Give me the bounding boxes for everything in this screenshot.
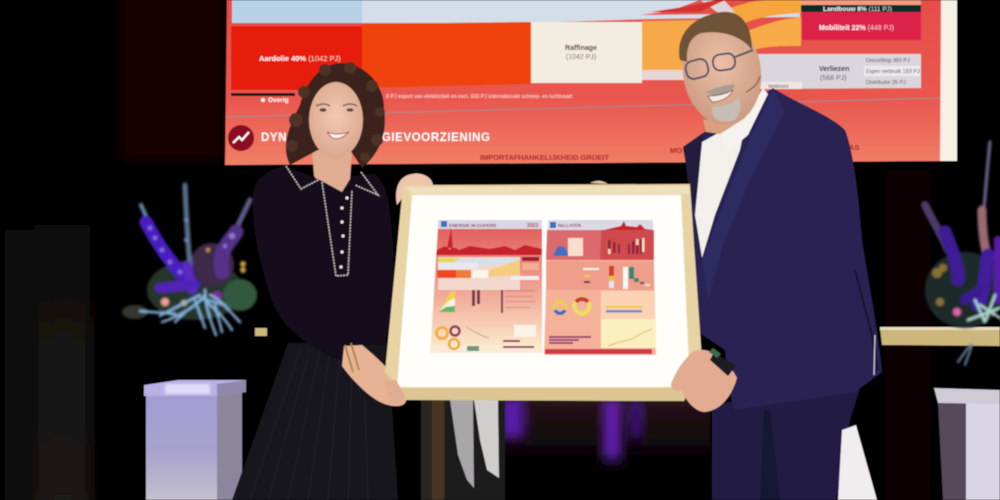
middle panel [546, 261, 654, 290]
poster purple bars [503, 340, 534, 348]
poster sankey band [437, 257, 539, 290]
Verliezen block: Omzetting 360 PJ [866, 58, 910, 64]
skyline with Eiffel tower [436, 228, 542, 255]
Verliezen block: Eigen verbruik 183 PJ [866, 69, 920, 75]
white right edge of screen [940, 0, 957, 161]
neck [312, 150, 352, 196]
stage curtain purple light [500, 395, 710, 460]
curly hair [286, 62, 385, 168]
Mobiliteit block [802, 12, 921, 40]
dim foliage [122, 243, 257, 320]
collar trim [286, 166, 378, 276]
buttons [339, 196, 349, 269]
navy jacket [683, 88, 882, 410]
fingers behind frame top [590, 181, 608, 184]
poster area chart blue [553, 246, 569, 256]
Mobiliteit block: Mobiliteit 22% (448 PJ) [819, 25, 894, 32]
white shirt [695, 125, 745, 258]
flow to refinery [362, 22, 531, 88]
white mat [397, 195, 690, 387]
purple stalks [146, 222, 193, 285]
Verliezen block: Distributie 25 PJ [866, 80, 906, 86]
poster text lines [505, 290, 535, 308]
arm and hand with bracelet [342, 343, 406, 406]
hand on top of frame [396, 174, 433, 205]
woman [232, 62, 433, 500]
woman's fingers on frame edge [384, 380, 406, 406]
Raffinage block [531, 22, 642, 83]
face [309, 82, 363, 158]
poster line chart [466, 327, 489, 338]
section heading: DYNAMIEK IN ENERGIEVOORZIENING [261, 132, 490, 144]
poster footer [545, 349, 652, 354]
Raffinage block: (1042 PJ) [566, 54, 596, 61]
poster horizontal bars [549, 306, 642, 344]
man's hand and watch on frame [384, 181, 745, 412]
right flower arrangement [925, 142, 1000, 365]
pleated skirt [232, 343, 398, 500]
poster grouped bars [608, 239, 642, 254]
jacket lapel [702, 88, 785, 300]
wooden frame [385, 184, 702, 401]
poster left page [430, 220, 542, 353]
left lapel [683, 133, 703, 205]
thin stems with buds [141, 185, 250, 290]
Verliezen block: Verliezen [768, 84, 789, 90]
easel behind frame [421, 400, 505, 500]
jacket side seam [855, 270, 878, 375]
top blue energy bands [232, 0, 921, 23]
facial features [316, 104, 357, 139]
projection screen [225, 0, 957, 165]
subheadings: IMPORTAFHANKELIJKHEID GROEIT [480, 153, 609, 162]
black knit top [253, 166, 394, 362]
poster left page: 2023 [527, 223, 538, 229]
lower panels [546, 291, 600, 350]
hand [671, 350, 737, 412]
man [676, 12, 882, 500]
icon: rising trend [228, 125, 254, 151]
left flower arrangement [122, 185, 257, 335]
trousers [712, 388, 877, 500]
poster area chart [438, 291, 455, 312]
Verliezen block: (568 PJ) [820, 75, 846, 82]
poster right page [544, 220, 656, 355]
Verliezen block: Verliezen [819, 66, 849, 73]
poster right title: NU LATER [558, 223, 582, 228]
subheadings: GAS [843, 143, 859, 152]
poster left title: ENERGIE IN CIJFERS [449, 223, 496, 228]
right table and pedestal [255, 327, 1000, 500]
headset microphone [746, 76, 760, 92]
Aardolie block: Aardolie 40% (1042 PJ) [259, 54, 341, 63]
hair [679, 12, 752, 62]
subheadings [480, 143, 859, 162]
framed poster [385, 184, 702, 401]
jacket cuff [725, 345, 745, 410]
poster donut charts [436, 326, 460, 349]
Verliezen block [758, 54, 921, 90]
Overig note: Overig [268, 97, 289, 104]
Aardolie block [231, 26, 362, 90]
small skyline [604, 221, 653, 230]
Overig note [231, 93, 573, 104]
Landbouw bar [801, 5, 921, 13]
top panels [546, 230, 601, 260]
orange product flows [642, 0, 801, 80]
Overig note: 8 PJ export van elektriciteit en excl. 600 PJ internationale scheep- en luchtvaart [386, 94, 573, 100]
smile and beard [705, 84, 740, 122]
glasses [684, 50, 753, 80]
pale blue foliage [140, 290, 240, 335]
head [676, 14, 768, 130]
subheadings: MO [670, 146, 682, 155]
Landbouw bar: Landbouw 8% (111 PJ) [823, 6, 892, 13]
watch [709, 348, 736, 376]
poster donut charts [554, 298, 590, 314]
left pedestal [144, 380, 246, 500]
screen background [225, 0, 957, 165]
poster column bars [472, 290, 503, 313]
poster line chart [608, 329, 652, 346]
Raffinage block: Raffinage [565, 45, 597, 52]
neck and collar [703, 88, 768, 152]
